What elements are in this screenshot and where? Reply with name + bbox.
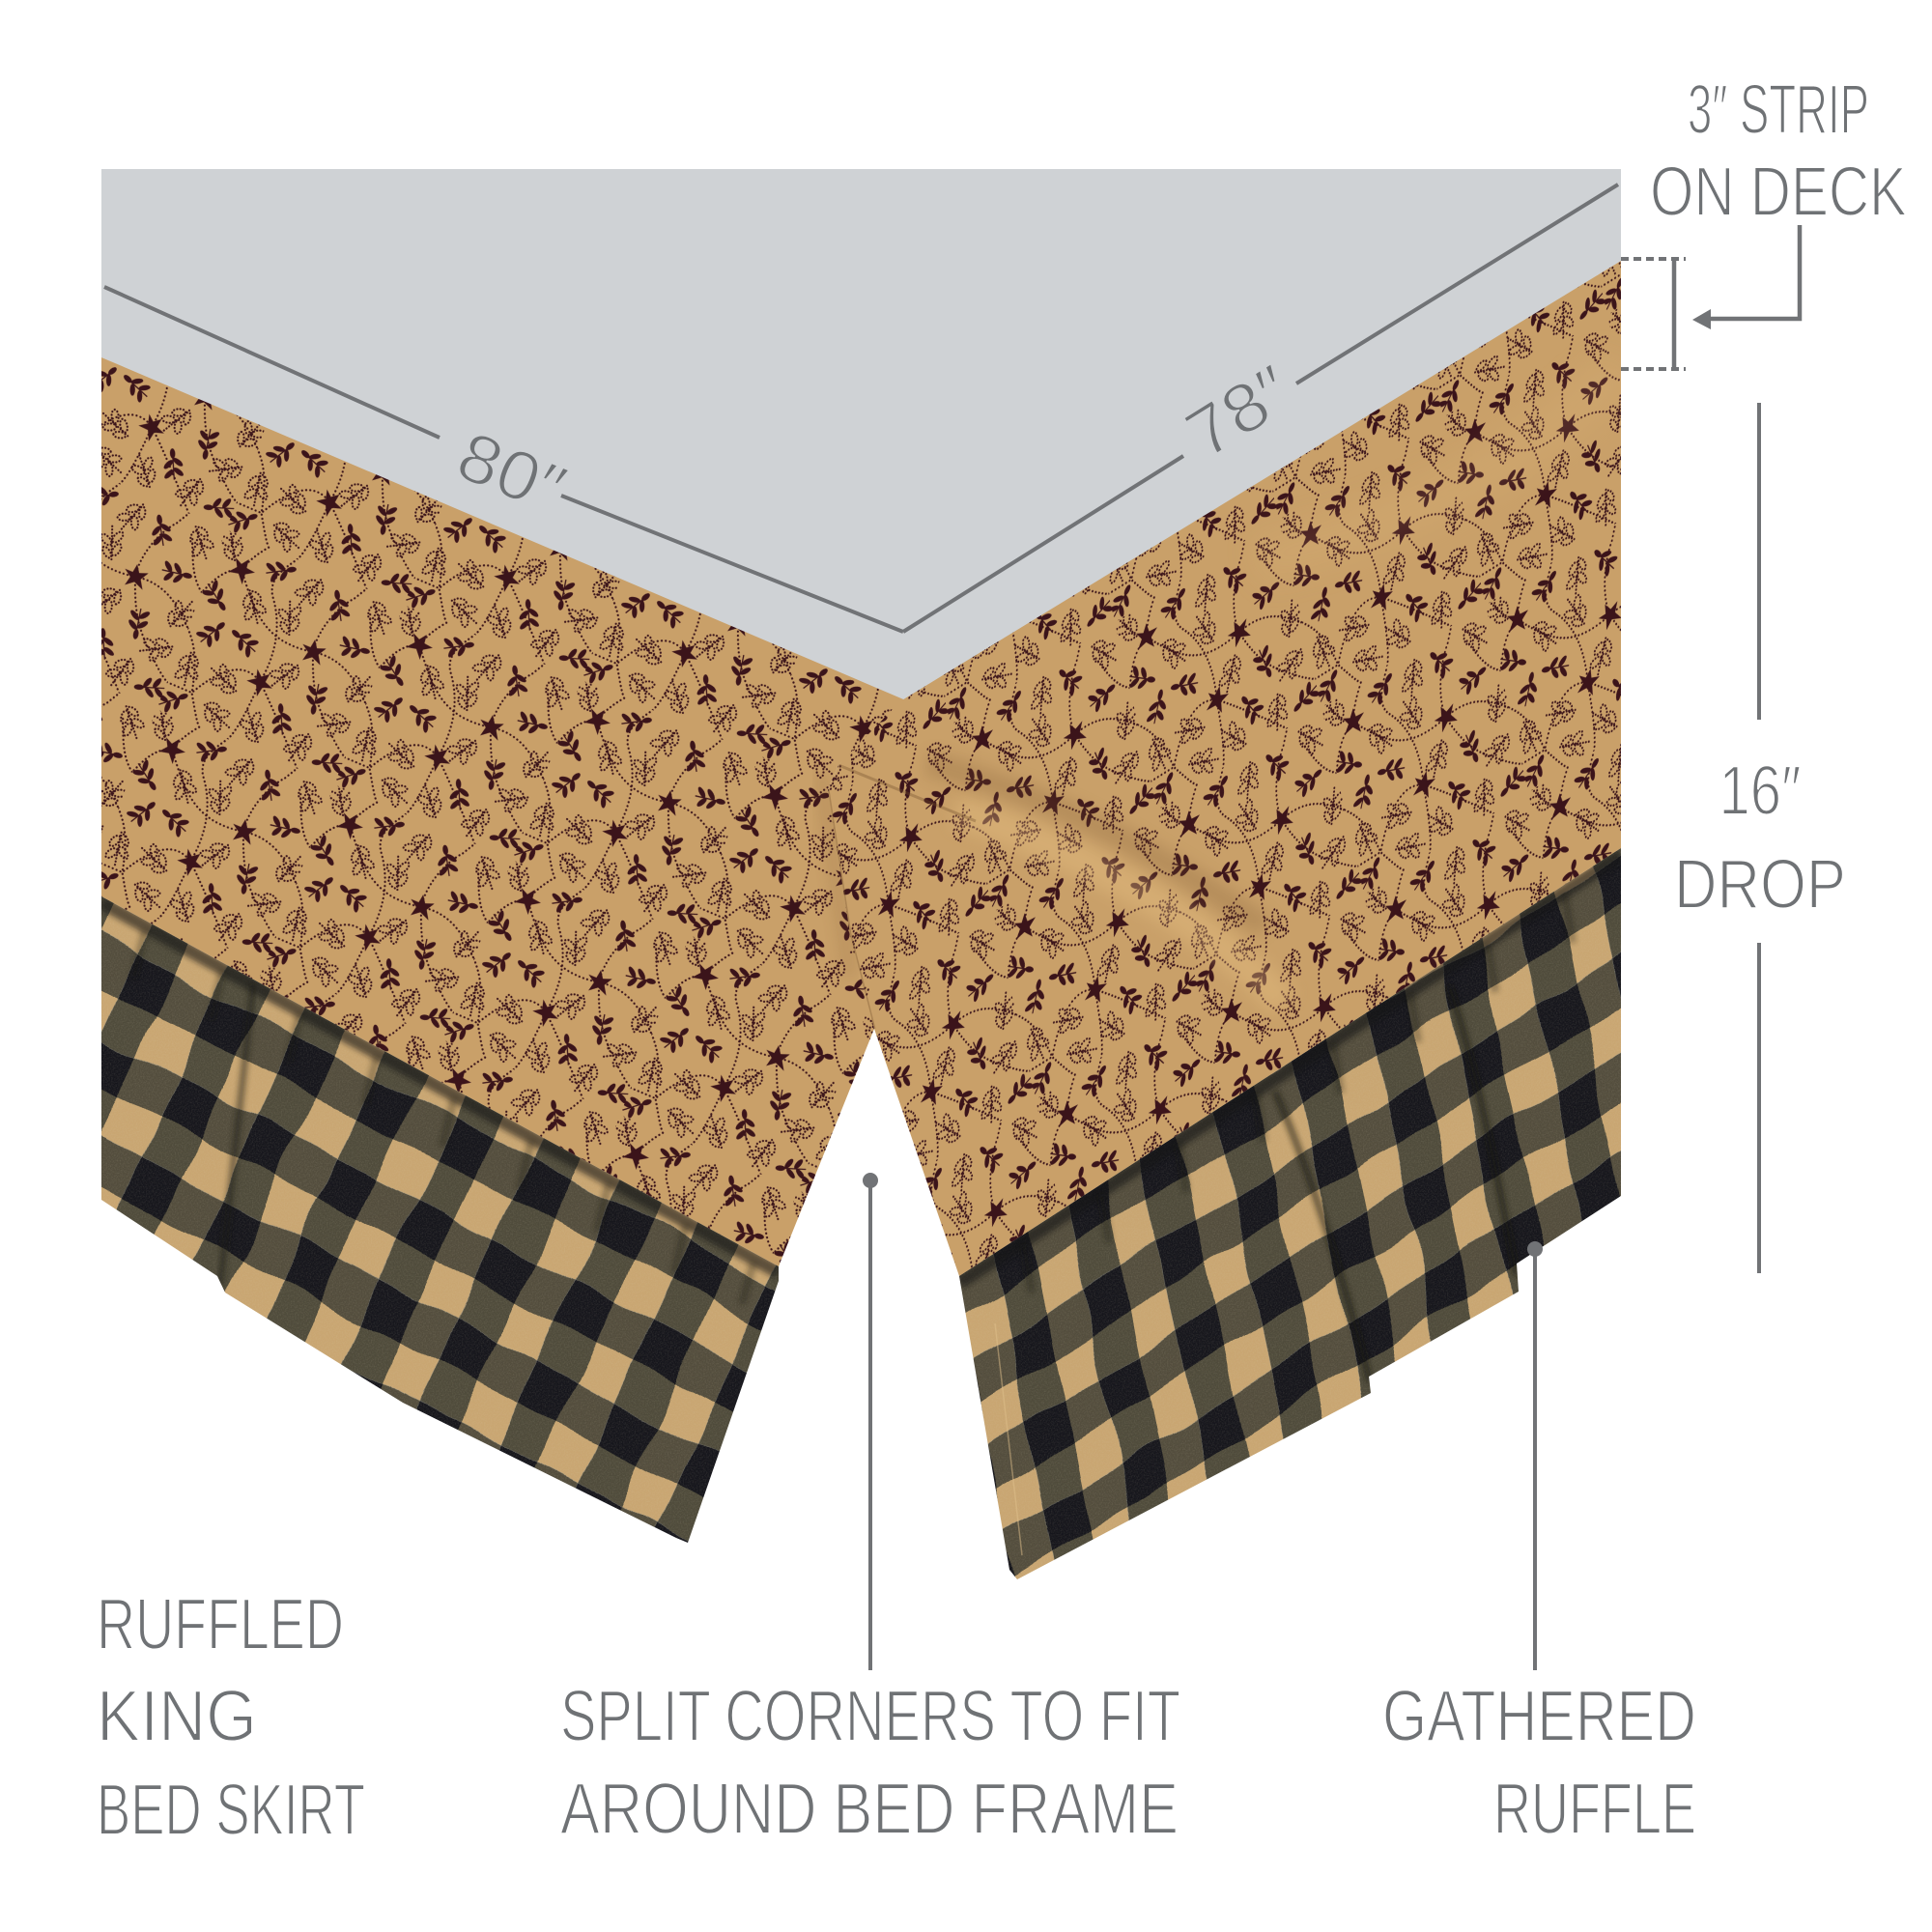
- callout: gathered ruffle: GATHERED: [1382, 1675, 1696, 1756]
- bed skirt illustration: [58, 242, 1662, 1594]
- dimension: 16 inch drop: DROP: [1674, 846, 1846, 923]
- panel: right floral fabric: [811, 242, 1642, 1294]
- callout: gathered ruffle: [1382, 1241, 1696, 1849]
- label: ruffled king bed skirt: RUFFLED: [97, 1583, 344, 1664]
- mattress deck: [101, 169, 1621, 705]
- callout: split corners: AROUND BED FRAME: [560, 1768, 1179, 1849]
- panel: left gingham ruffle: [101, 896, 779, 1543]
- callout: split corners: SPLIT CORNERS TO FIT: [560, 1675, 1180, 1756]
- callout: gathered ruffle: RUFFLE: [1493, 1768, 1696, 1849]
- dimension: 80 inch: 80″: [446, 417, 576, 529]
- dimension: 78 inch: 78″: [1173, 351, 1306, 473]
- label: ruffled king bed skirt: BED SKIRT: [97, 1769, 365, 1850]
- callout: 3 inch strip on deck: [1621, 71, 1907, 369]
- label: ruffled king bed skirt: KING: [97, 1675, 257, 1756]
- panel: right gingham ruffle: [959, 848, 1621, 1579]
- dimension: 16 inch drop: 16″: [1719, 753, 1801, 830]
- dimension: 16 inch drop: [1674, 403, 1846, 1273]
- dimension: 80 inch: [104, 287, 903, 632]
- callout: split corners: [560, 1173, 1180, 1849]
- label: ruffled king bed skirt: [97, 1583, 365, 1850]
- dimension: 78 inch: [903, 185, 1618, 632]
- panel: left floral fabric: [87, 338, 918, 1294]
